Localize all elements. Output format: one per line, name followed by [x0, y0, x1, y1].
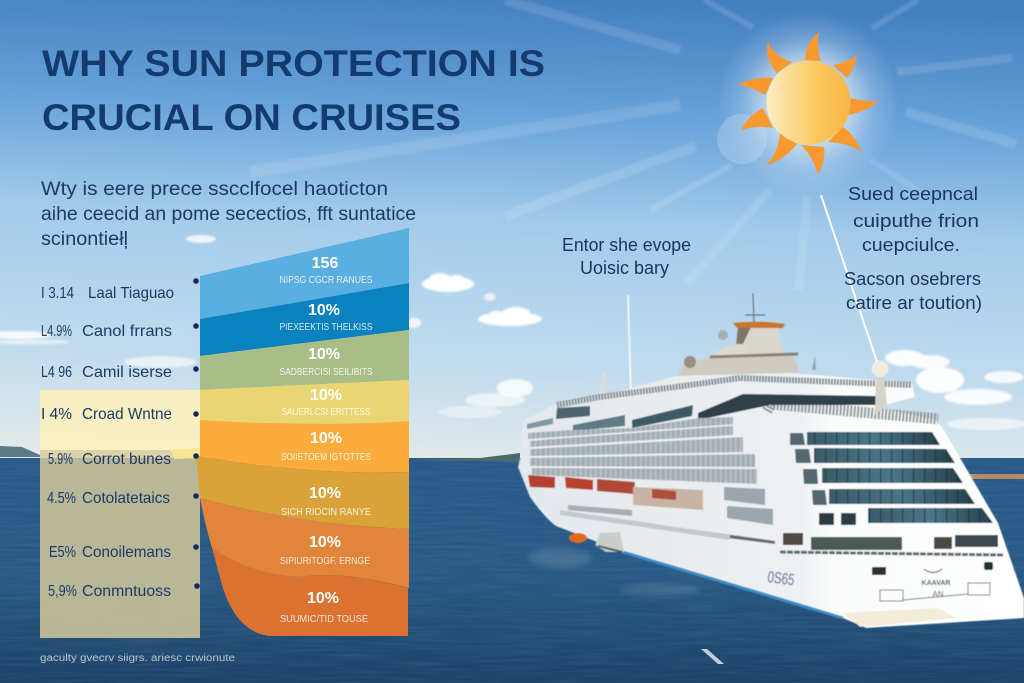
stern glass mullions [807, 432, 993, 523]
funnel row labels: Cotolatetaics [82, 490, 170, 507]
stern name [922, 569, 950, 599]
balcony bands [528, 417, 757, 484]
funnel values and captions: SIPIURITOGF. ERNGE [280, 555, 370, 567]
callout: ship annotation: Entor she evope [562, 235, 691, 255]
callout: sun protection note: catire ar toution) [846, 293, 982, 313]
intro text block [41, 179, 416, 250]
funnel values and captions: 10% [310, 430, 342, 447]
sea glints [528, 548, 700, 596]
funnel row labels: Conmntuoss [82, 583, 171, 600]
distant shores [0, 446, 1024, 479]
funnel row labels: E5% [49, 544, 76, 561]
funnel row labels: 5,9% [48, 583, 77, 600]
funnel values and captions: 156 [312, 255, 338, 272]
stern small windows [872, 562, 993, 575]
funnel values and captions: NIPSG CGCR RANUES [280, 274, 372, 286]
stern name: KAAVAR [922, 580, 950, 587]
funnel values and captions: 10% [307, 590, 339, 607]
intro text block: Wty is eere prece sscclfocel haoticton [41, 179, 388, 200]
band 2 [200, 283, 409, 356]
callout: sun protection note: Sued ceepncal [848, 184, 978, 204]
funnel row labels [41, 285, 174, 600]
funnel row labels: Laal Tiaguao [88, 285, 174, 302]
lifeboats [528, 475, 703, 510]
intro text block: scinontiełļ [41, 229, 128, 250]
funnel values and captions: SUUMIC/TID TOUSE [280, 613, 368, 625]
wake marks [701, 649, 724, 664]
title: WHY SUN PROTECTION IS [42, 43, 545, 84]
band 7 [200, 498, 409, 588]
funnel values and captions: SAUERLCSI ERITTESS [282, 406, 370, 418]
funnel values and captions: SADBERCISI SEILIBITS [280, 366, 372, 378]
funnel row labels: L4 96 [41, 364, 72, 381]
funnel row labels: Camil iserse [82, 364, 172, 381]
sea texture [0, 458, 1024, 683]
pointer line [821, 195, 877, 362]
stern glass rows [807, 432, 993, 523]
funnel row labels: 5.9% [48, 451, 73, 468]
funnel row labels: L4.9% [41, 323, 72, 340]
intro text block: aihe ceecid an pome secectios, fft suntatice [41, 204, 416, 225]
funnel tower [598, 293, 816, 397]
band 1 [200, 228, 409, 319]
panel: pale label backing [40, 390, 200, 638]
sun rays [250, 0, 1016, 290]
callout: sun protection note: cuepciulce. [862, 235, 960, 255]
callout: sun protection note [844, 184, 982, 313]
stern name: AN [932, 590, 944, 599]
icon: sun [716, 11, 900, 195]
funnel values and captions: SOIIETOEM IGTOTTES [281, 451, 371, 463]
title: CRUCIAL ON CRUISES [42, 97, 461, 138]
hull number: 0S65 [767, 569, 795, 589]
funnel values and captions: 10% [310, 387, 342, 404]
callout: ship annotation: Uoisic bary [580, 258, 669, 278]
funnel values and captions: 10% [309, 485, 341, 502]
stern plaques [880, 583, 990, 601]
band 8 [212, 548, 408, 636]
stern side windows [790, 433, 856, 525]
funnel row labels: Croad Wntne [82, 406, 172, 423]
balcony dividing rails [527, 425, 757, 468]
upper glass decks [527, 394, 877, 431]
funnel row labels: I 4% [41, 406, 72, 423]
funnel row labels: I 3.14 [41, 285, 74, 302]
top deck railings [557, 378, 938, 419]
radar dome [872, 360, 888, 415]
callout: ship annotation [562, 235, 691, 278]
footer note: gaculty gvecrv siigrs. ariesc crwionute [40, 653, 236, 664]
callout: sun protection note: cuiputhe frion [853, 211, 979, 231]
callout: sun protection note: Sacson osebrers [844, 269, 981, 289]
sea [0, 458, 1024, 683]
stern platform [843, 608, 957, 627]
funnel values and captions: SICH RIOCIN RANYE [281, 506, 371, 518]
band 3 [200, 330, 409, 390]
superstructure and hull [518, 373, 1024, 628]
sky background [0, 0, 1024, 462]
funnel values and captions: 10% [308, 346, 340, 363]
mast [627, 295, 632, 395]
funnel row labels: Canol frrans [82, 323, 172, 340]
band 4 [200, 380, 409, 424]
funnel values and captions [280, 255, 372, 625]
band 5 [200, 420, 409, 472]
funnel chart [196, 228, 409, 636]
funnel row markers [193, 278, 200, 589]
tender boat and buoy [569, 532, 624, 552]
clouds [0, 235, 1024, 430]
funnel values and captions: PIEXEEKTIS THELKISS [280, 321, 372, 333]
hull waterline stripe [623, 552, 843, 618]
side windows [560, 487, 775, 544]
funnel row labels: Conoilemans [82, 544, 171, 561]
title [42, 43, 545, 138]
funnel values and captions: 10% [309, 534, 341, 551]
funnel row labels: 4.5% [47, 490, 76, 507]
ship [518, 293, 1024, 628]
funnel values and captions: 10% [308, 302, 340, 319]
funnel row labels: Corrot bunes [82, 451, 171, 468]
lower stern windows [783, 533, 998, 550]
name strip [780, 552, 1003, 555]
band 6 [196, 456, 409, 529]
